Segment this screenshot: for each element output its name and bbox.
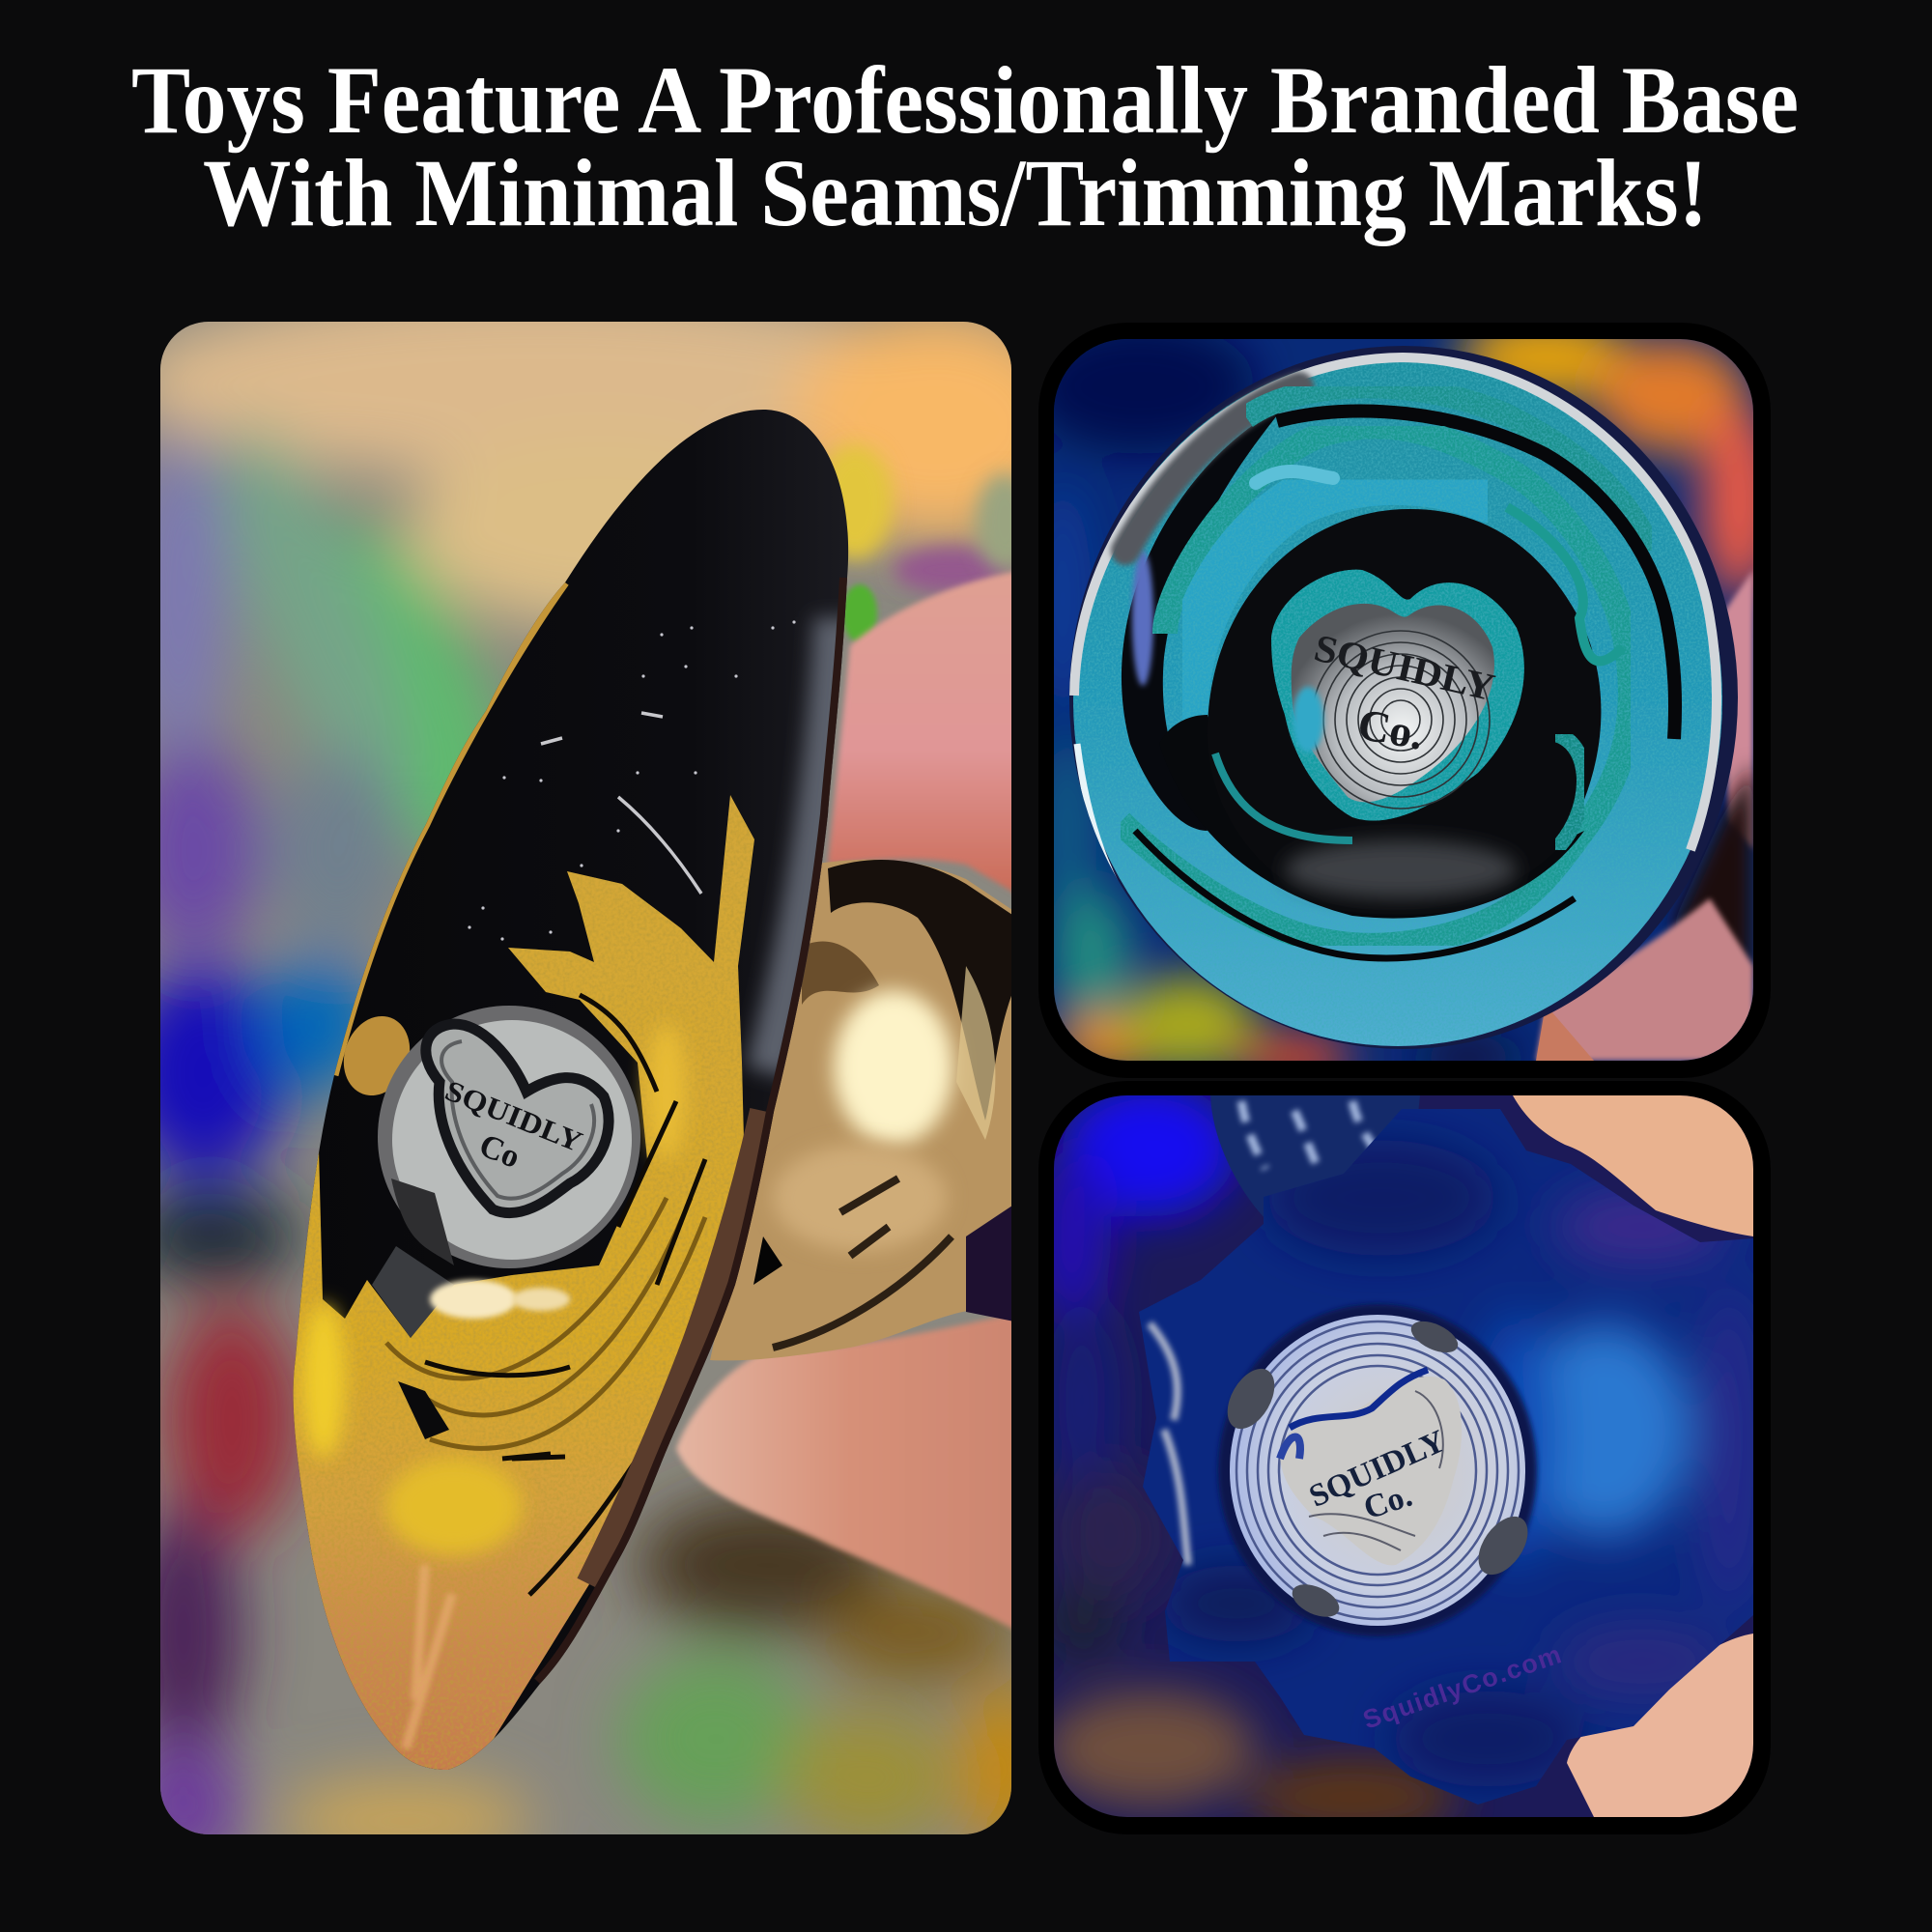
base disc xyxy=(270,396,869,1787)
coin: Squidly Co logo, gray: Co xyxy=(474,1127,525,1176)
title xyxy=(131,46,1799,246)
coin: Squidly Co logo, lined heart: Co. xyxy=(1354,699,1427,759)
hand: upper finger xyxy=(1513,1095,1753,1236)
sheen on right edge xyxy=(768,618,837,1072)
background colours xyxy=(1054,339,1753,1061)
background colours xyxy=(1034,1082,1753,1835)
gold shaft xyxy=(710,860,1024,1360)
panel: bottom right frame xyxy=(1038,1081,1771,1834)
coin: Squidly Co logo, lined heart: SQUIDLY xyxy=(1310,626,1499,709)
coin: Squidly Co logo, concentric rings: SQUIDLY xyxy=(1304,1424,1451,1515)
rim edge xyxy=(589,1111,763,1584)
coin: Squidly Co logo, lined heart xyxy=(1271,570,1524,821)
coin: Squidly Co logo, concentric rings: Co. xyxy=(1359,1478,1416,1526)
panel: top right photo, teal swirl base xyxy=(1054,339,1753,1061)
dark swirl lines xyxy=(386,1198,705,1448)
watermark: SquidlyCo.com xyxy=(1359,1639,1566,1735)
top green band xyxy=(1246,386,1652,551)
dark cone xyxy=(1208,509,1601,910)
gold swirl xyxy=(280,795,754,1787)
hand: upper finger xyxy=(828,570,1024,898)
coin: Squidly Co logo, gray: SQUIDLY xyxy=(440,1074,587,1158)
large blue swirl xyxy=(1182,480,1488,763)
panel: top right frame xyxy=(1038,323,1771,1078)
inner teal S band xyxy=(1507,507,1623,661)
coin: Squidly Co logo, gray xyxy=(378,1006,640,1268)
hand: lower finger xyxy=(676,1312,1024,1634)
silver rim highlight xyxy=(1074,357,1717,850)
title: Toys Feature A Professionally Branded Base xyxy=(131,46,1799,154)
panel: left photo, gold and black base xyxy=(160,322,1011,1834)
panel: bottom right photo, blue star base xyxy=(1034,1082,1758,1835)
teal outer band xyxy=(1073,355,1722,1046)
green-teal spiral band xyxy=(1121,426,1631,946)
blue tentacles xyxy=(1210,1095,1420,1219)
coin: Squidly Co logo, concentric rings xyxy=(1218,1304,1538,1636)
lower left black region xyxy=(1159,715,1584,919)
gold blob xyxy=(344,1016,410,1095)
blue star base xyxy=(1130,1101,1758,1816)
black crescent, upper left xyxy=(1122,406,1285,831)
sparkle marks xyxy=(541,713,701,894)
lower black line xyxy=(1135,831,1575,958)
disc xyxy=(1063,343,1748,1053)
holographic background xyxy=(160,322,1011,1834)
bright glitter patches xyxy=(302,1024,686,1555)
hand: lower finger xyxy=(1567,1634,1753,1817)
outer black spiral xyxy=(1277,411,1675,739)
title: With Minimal Seams/Trimming Marks! xyxy=(203,139,1708,246)
